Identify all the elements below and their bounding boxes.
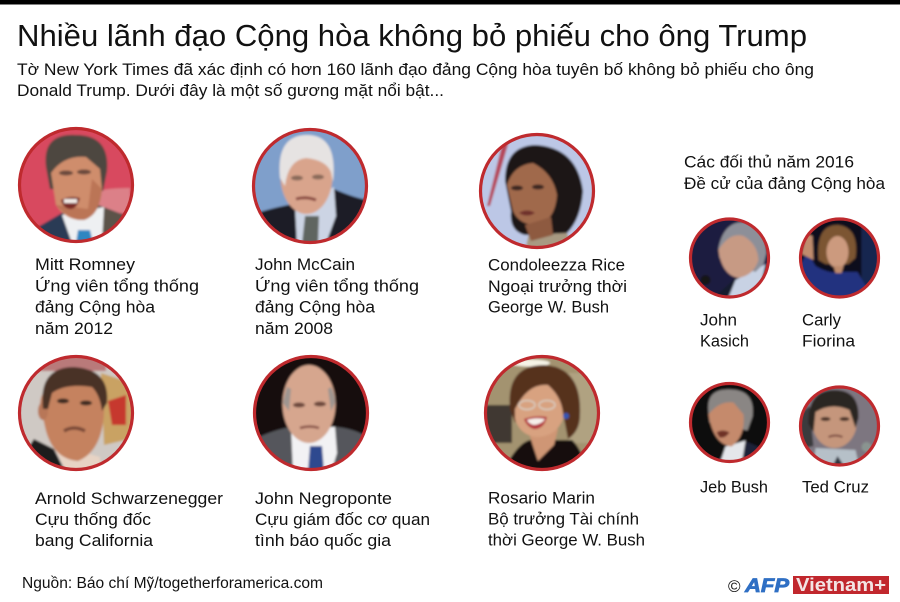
label: John Kasich: Kasich [700, 332, 749, 350]
intro text: Donald Trump. Dưới đây là một số gương mặt nổi bật... [17, 81, 444, 100]
panel: Rosario Marin [482, 353, 645, 550]
label: John McCain: đảng Cộng hòa [255, 298, 376, 316]
label: John McCain: năm 2008 [255, 319, 333, 338]
logo: AFP: AFP [744, 576, 789, 597]
photo: Carly Fiorina [798, 216, 882, 300]
label: Mitt Romney: đảng Cộng hòa [35, 298, 156, 316]
photo: Jeb Bush [688, 380, 772, 464]
label: Carly Fiorina [802, 310, 856, 350]
label: Mitt Romney [35, 255, 199, 338]
label: Mitt Romney: năm 2012 [35, 319, 113, 338]
panel: Jeb Bush [688, 380, 772, 496]
panel: Arnold Schwarzenegger [16, 353, 223, 550]
panel: Carly Fiorina [798, 216, 882, 350]
label: John Kasich: John [700, 310, 737, 330]
label: Condoleezza Rice: George W. Bush [488, 298, 609, 316]
label: Condoleezza Rice: Condoleezza Rice [488, 256, 625, 274]
label: John McCain: John McCain [255, 255, 355, 274]
panel: Mitt Romney [16, 125, 199, 338]
heading: 2016 rivals: Các đối thủ năm 2016 [684, 152, 854, 172]
label: Mitt Romney: Mitt Romney [35, 255, 136, 274]
photo: Ted Cruz [798, 384, 882, 468]
label: Arnold Schwarzenegger: Cựu thống đốc [35, 510, 152, 529]
label: Rosario Marin [488, 488, 645, 550]
label: Condoleezza Rice [488, 256, 627, 316]
label: Rosario Marin: thời George W. Bush [488, 530, 645, 550]
label: John McCain [255, 255, 419, 338]
label: John Negroponte [255, 489, 430, 550]
photo: Condoleezza Rice [477, 131, 597, 251]
label: Ted Cruz: Ted Cruz [802, 478, 869, 496]
label: John McCain: Ứng viên tổng thống [255, 276, 419, 296]
photo: Rosario Marin [482, 353, 602, 473]
photo: John Negroponte [251, 353, 371, 473]
label: Jeb Bush: Jeb Bush [700, 478, 768, 496]
photo: John McCain [250, 126, 370, 246]
label: Arnold Schwarzenegger: Arnold Schwarzenegger [35, 489, 223, 508]
panel: John McCain [250, 126, 419, 338]
panel: Condoleezza Rice [477, 131, 627, 316]
top black bar [0, 0, 900, 4]
label: Condoleezza Rice: Ngoại trưởng thời [488, 277, 627, 296]
heading: 2016 rivals [684, 152, 886, 193]
copyright symbol: © [728, 577, 741, 596]
title: Nhiều lãnh đạo Cộng hòa không bỏ phiếu cho ông Trump [17, 18, 807, 53]
label: Rosario Marin: Rosario Marin [488, 488, 595, 508]
photo: Mitt Romney [16, 125, 136, 245]
label: Carly Fiorina: Carly [802, 310, 841, 330]
panel: Ted Cruz [798, 384, 882, 496]
intro text [17, 60, 814, 100]
source note: Nguồn: Báo chí Mỹ/togetherforamerica.com [22, 575, 323, 592]
label: John Negroponte: tình báo quốc gia [255, 531, 392, 550]
label: Mitt Romney: Ứng viên tổng thống [35, 276, 199, 296]
photo: John Kasich [688, 216, 772, 300]
photo: Arnold Schwarzenegger [16, 353, 136, 473]
label: Carly Fiorina: Fiorina [802, 332, 856, 350]
logo: AFP Vietnam+ [728, 575, 889, 597]
panel: John Negroponte [251, 353, 430, 550]
heading: 2016 rivals: Đề cử của đảng Cộng hòa [684, 174, 886, 193]
panel: John Kasich [688, 216, 772, 350]
label: Arnold Schwarzenegger: bang California [35, 531, 154, 550]
label: John Negroponte: John Negroponte [255, 489, 392, 508]
label: John Negroponte: Cựu giám đốc cơ quan [255, 510, 430, 529]
label: John Kasich [700, 310, 749, 350]
intro text: Tờ New York Times đã xác định có hơn 160 lãnh đạo đảng Cộng hòa tuyên bố không bỏ phiếu cho ông [17, 60, 814, 79]
logo: Vietnam+ badge: Vietnam+ [796, 575, 886, 595]
label: Rosario Marin: Bộ trưởng Tài chính [488, 510, 639, 528]
label: Arnold Schwarzenegger [35, 489, 223, 550]
